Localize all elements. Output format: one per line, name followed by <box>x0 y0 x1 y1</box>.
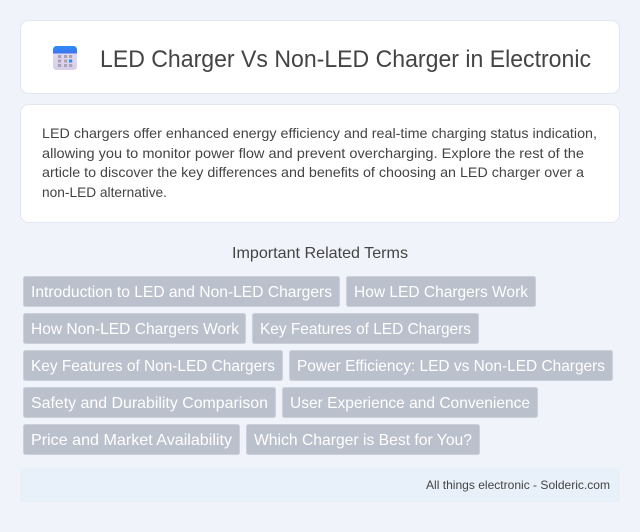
panel: title card <box>20 20 620 94</box>
tag: how non-LED chargers work <box>24 314 246 344</box>
tag: safety and durability: Safety and Durability Comparison <box>31 395 268 412</box>
tag: introduction <box>24 276 340 306</box>
tag: price and market <box>24 424 240 454</box>
tag: introduction: Introduction to LED and Non-LED Chargers <box>31 284 332 301</box>
panel: summary <box>20 104 620 222</box>
tag: key features of LED: Key Features of LED Chargers <box>260 321 471 338</box>
text block: summary paragraph <box>42 125 597 200</box>
tag: key features of LED <box>252 314 478 344</box>
title: LED Charger Vs Non-LED Charger in Electronic <box>100 46 591 73</box>
tag: key features of non-LED <box>24 350 282 380</box>
tag: key features of non-LED: Key Features of Non-LED Chargers <box>31 358 275 375</box>
tag: power efficiency <box>290 350 612 380</box>
footer credit: All things electronic - Solderic.com <box>426 478 610 492</box>
tag: how non-LED chargers work: How Non-LED Chargers Work <box>31 321 240 338</box>
heading: related terms: Important Related Terms <box>232 245 408 262</box>
tag: safety and durability <box>24 388 276 418</box>
text block: summary paragraph: article to discover the key differences and benefits of choosing an LED charger over a <box>42 164 584 180</box>
tag: power efficiency: Power Efficiency: LED vs Non-LED Chargers <box>297 358 605 375</box>
icon: calendar <box>53 46 77 70</box>
text block: summary paragraph: allowing you to monitor power flow and prevent overcharging. Explore the rest of the <box>42 145 584 161</box>
tag: which charger: Which Charger is Best for You? <box>254 432 472 449</box>
footer <box>20 468 620 502</box>
text block: summary paragraph: non-LED alternative. <box>42 184 167 200</box>
tag: price and market: Price and Market Availability <box>31 432 232 449</box>
tag: user experience <box>282 388 538 418</box>
tag: how LED chargers work: How LED Chargers Work <box>354 284 529 301</box>
text block: summary paragraph: LED chargers offer enhanced energy efficiency and real-time charging status indication, <box>42 125 597 141</box>
tag: how LED chargers work <box>346 276 536 306</box>
tag list <box>24 276 612 454</box>
tag: which charger <box>246 424 480 454</box>
tag: user experience: User Experience and Convenience <box>290 395 530 412</box>
